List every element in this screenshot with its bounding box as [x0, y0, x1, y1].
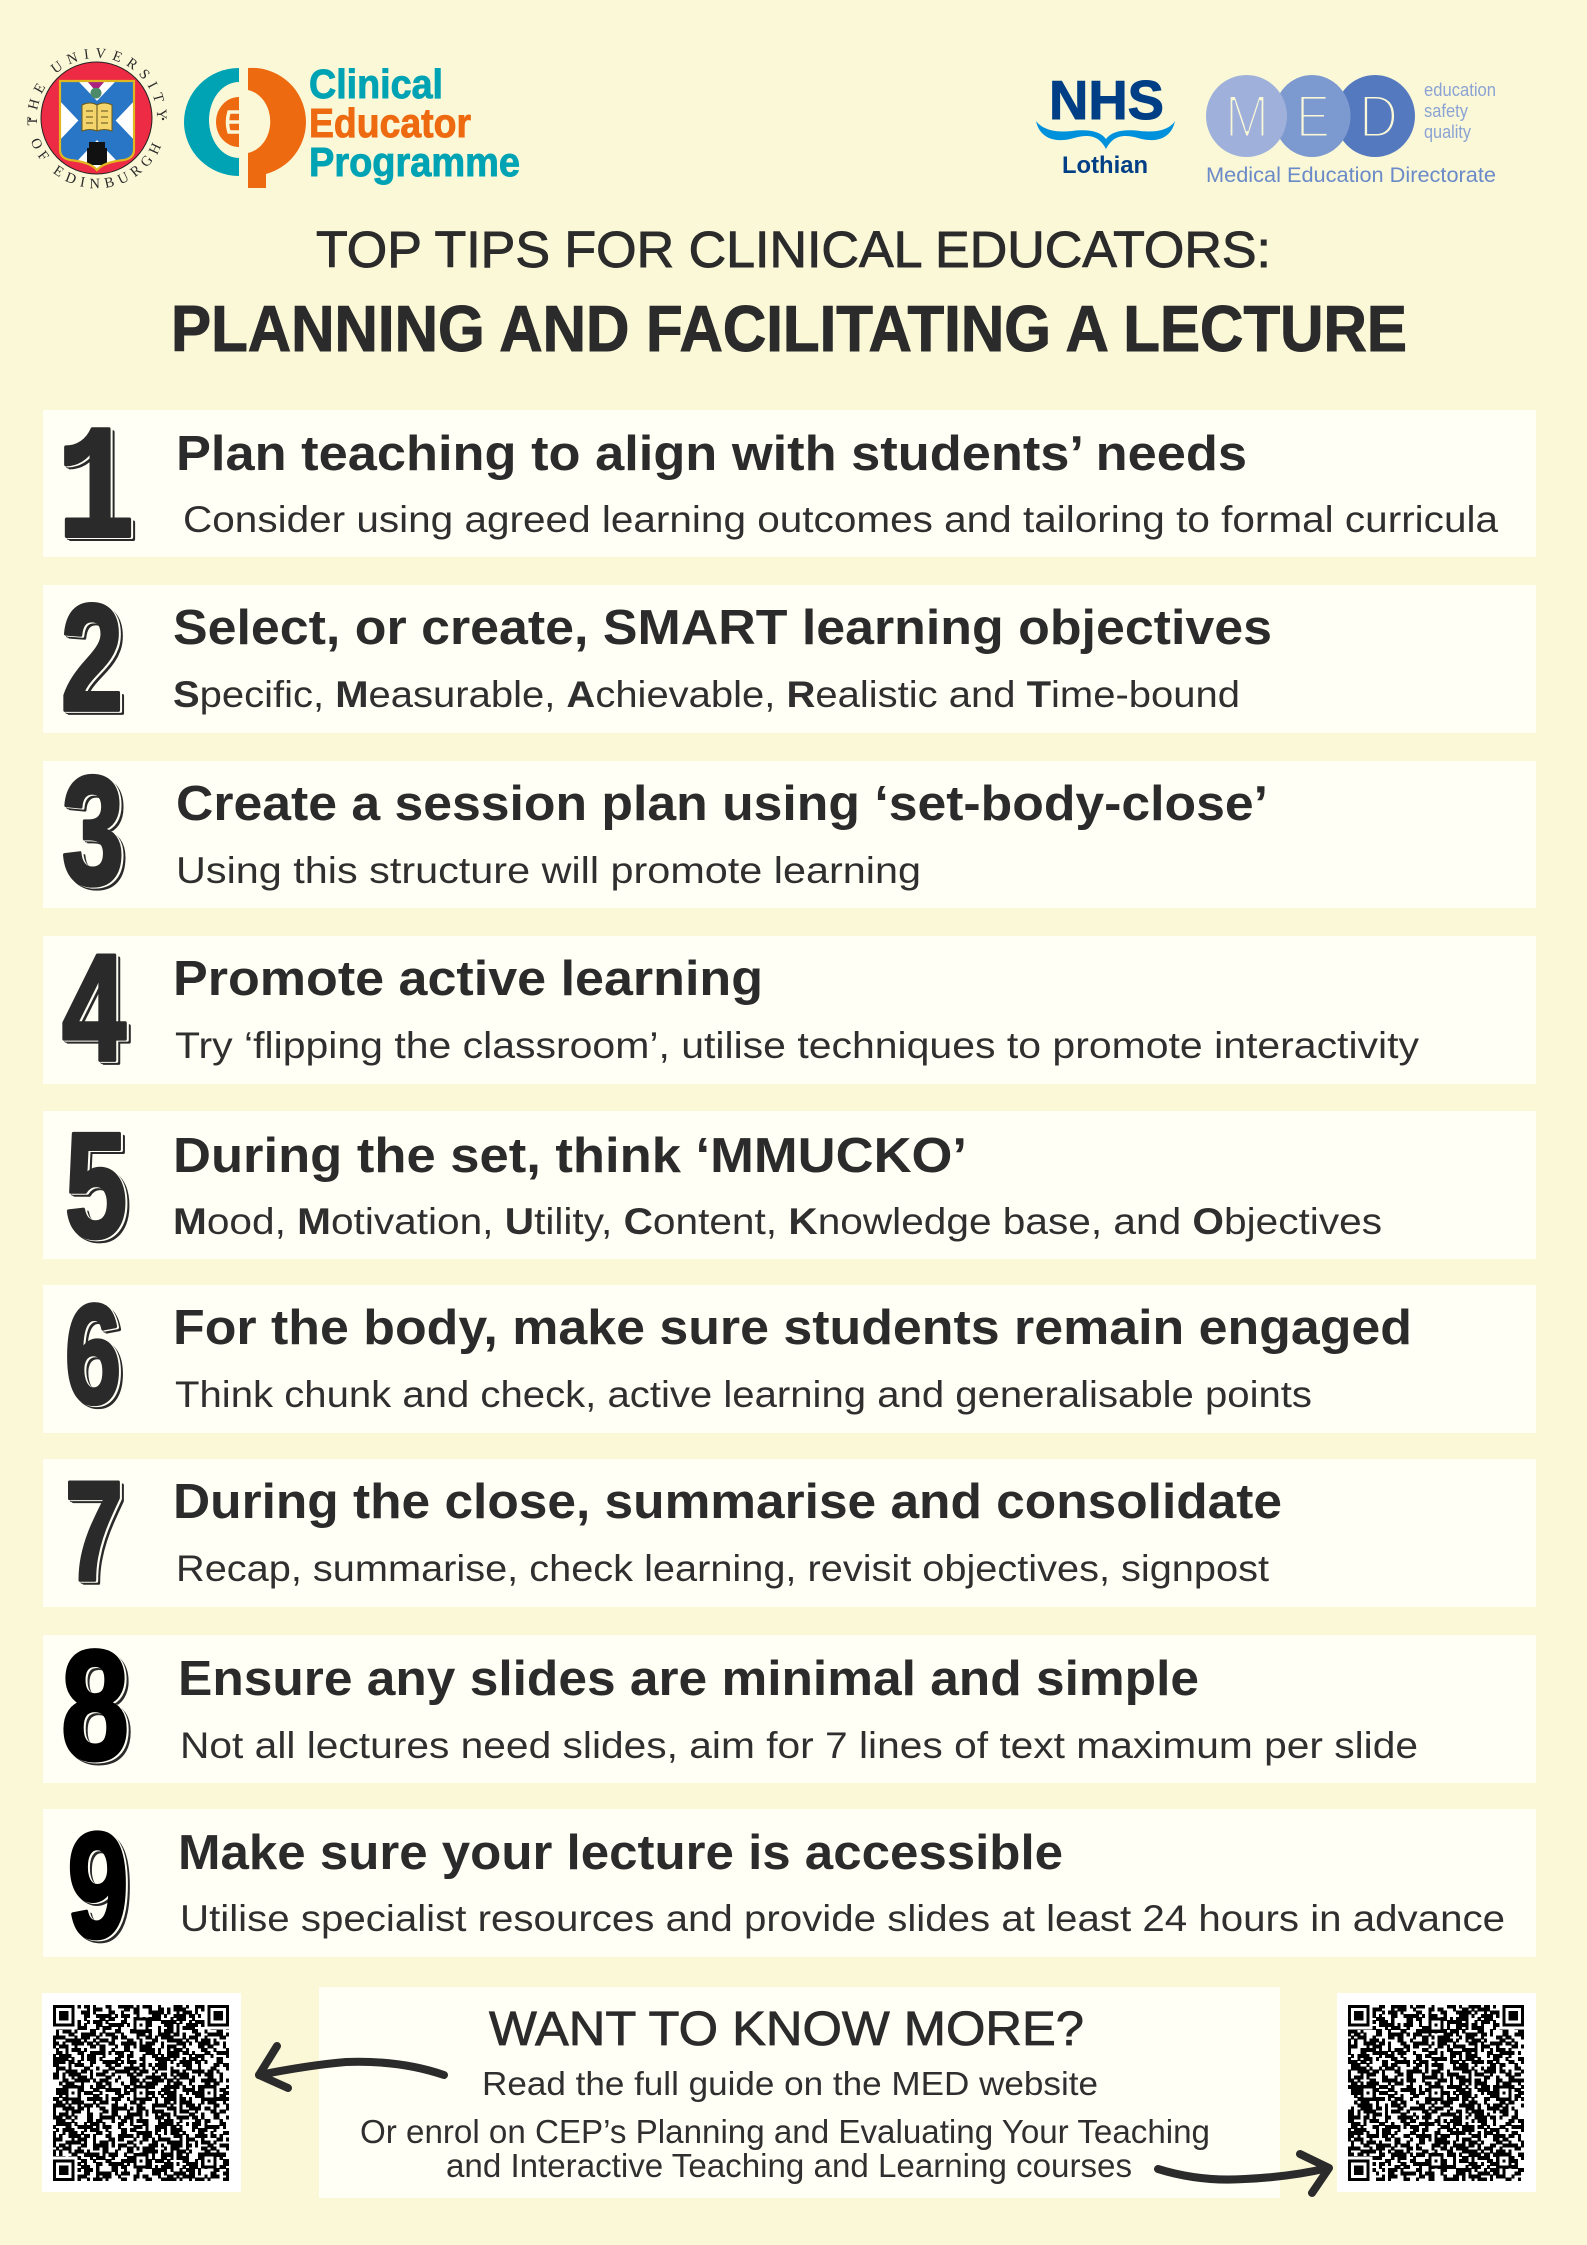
heading: Plan teaching to align with students’ needs [176, 427, 1247, 481]
logo: Medical Education Directorate [1206, 75, 1496, 187]
panel: tip 9 [43, 1801, 1536, 1969]
logo wordmark [309, 61, 520, 185]
text: courses: Or enrol on CEP’s Planning and Evaluating Your Teaching [360, 2113, 1210, 2150]
title [171, 221, 1407, 365]
panel: tip 3 [43, 744, 1536, 917]
logo: Medical Education Directorate: quality [1424, 121, 1472, 142]
number 9: 9 [67, 1801, 129, 1969]
heading: WANT TO KNOW MORE? [489, 2003, 1084, 2056]
text: courses [360, 2113, 1210, 2184]
panel: tip 6 [43, 1276, 1536, 1434]
description: Utilise specialist resources and provide slides at least 24 hours in advance [180, 1898, 1505, 1939]
number 4: 4 [62, 922, 126, 1093]
logo wordmark: Educator [309, 100, 471, 146]
heading: During the set, think ‘MMUCKO’ [173, 1129, 967, 1183]
description: Using this structure will promote learning [176, 850, 921, 891]
heading: Ensure any slides are minimal and simple [178, 1652, 1199, 1706]
description: Think chunk and check, active learning and generalisable points [175, 1374, 1312, 1415]
number 7: 7 [65, 1453, 123, 1611]
logo: University of Edinburgh crest: THE UNIVERSITY [28, 48, 166, 126]
logo: Medical Education Directorate: education [1424, 79, 1496, 100]
arrow: to left QR code [259, 2046, 444, 2088]
number 2: 2 [61, 573, 123, 743]
description: Consider using agreed learning outcomes and tailoring to formal curricula [183, 499, 1498, 540]
description: Try ‘flipping the classroom’, utilise techniques to promote interactivity [175, 1025, 1420, 1066]
panel: tip 8 [43, 1618, 1536, 1792]
icon: teal C half-ring [184, 68, 239, 176]
text: courses: and Interactive Teaching and Learning courses [446, 2147, 1132, 2184]
icon: orange inner half disc with E [216, 97, 239, 147]
logo wordmark: Programme [309, 139, 520, 185]
panel: tip 4 [43, 922, 1536, 1093]
heading: During the close, summarise and consolidate [173, 1475, 1282, 1529]
panel: tip 7 [43, 1453, 1536, 1611]
title: PLANNING AND FACILITATING A LECTURE [171, 292, 1407, 365]
logo: Medical Education Directorate: E [1296, 83, 1330, 150]
description: Not all lectures need slides, aim for 7 lines of text maximum per slide [180, 1725, 1418, 1766]
number 1: 1 [57, 403, 135, 586]
icon: orange P shape [248, 68, 306, 188]
QR code: CEP courses [1299, 1993, 1536, 2192]
logo: University of Edinburgh crest: OF EDINBURGH [32, 138, 162, 188]
logo wordmark: Clinical [309, 61, 443, 107]
heading: For the body, make sure students remain engaged [173, 1301, 1412, 1355]
panel: want to know more [319, 1987, 1280, 2198]
arrow: to right QR code [1158, 2154, 1329, 2193]
logo: Medical Education Directorate: D [1359, 83, 1398, 150]
logo: Clinical Educator Programme [184, 61, 520, 188]
number 6: 6 [65, 1276, 121, 1434]
description: Recap, summarise, check learning, revisit objectives, signpost [176, 1548, 1270, 1589]
QR code: MED website guide [4, 1993, 241, 2192]
description: Specific, Measurable, Achievable, Realistic and Time-bound [173, 674, 1240, 715]
number 5: 5 [65, 1102, 127, 1270]
icon: E notch [228, 112, 239, 132]
text: guide: Read the full guide on the MED website [482, 2065, 1098, 2102]
panel: tip 5 [43, 1102, 1536, 1270]
number 8: 8 [61, 1618, 129, 1792]
logo: NHS Lothian: Lothian [1062, 152, 1148, 179]
logo: NHS Lothian [1036, 69, 1175, 179]
heading: Make sure your lecture is accessible [178, 1826, 1063, 1880]
logo: University of Edinburgh crest [28, 48, 166, 188]
heading: Select, or create, SMART learning objectives [173, 601, 1272, 655]
logo: Medical Education Directorate: M [1225, 83, 1269, 150]
number 3: 3 [62, 744, 124, 917]
description: Mood, Motivation, Utility, Content, Knowledge base, and Objectives [173, 1201, 1382, 1242]
heading: Create a session plan using ‘set-body-close’ [176, 777, 1268, 831]
panel: tip 2 [43, 573, 1536, 743]
panel: tip 1 [43, 403, 1536, 586]
heading: Promote active learning [173, 952, 763, 1006]
logo: Medical Education Directorate: safety [1424, 100, 1469, 121]
logo: Medical Education Directorate: Medical Education Directorate [1206, 164, 1496, 187]
title: TOP TIPS FOR CLINICAL EDUCATORS: [316, 221, 1271, 278]
logo: NHS Lothian: NHS [1049, 69, 1164, 131]
